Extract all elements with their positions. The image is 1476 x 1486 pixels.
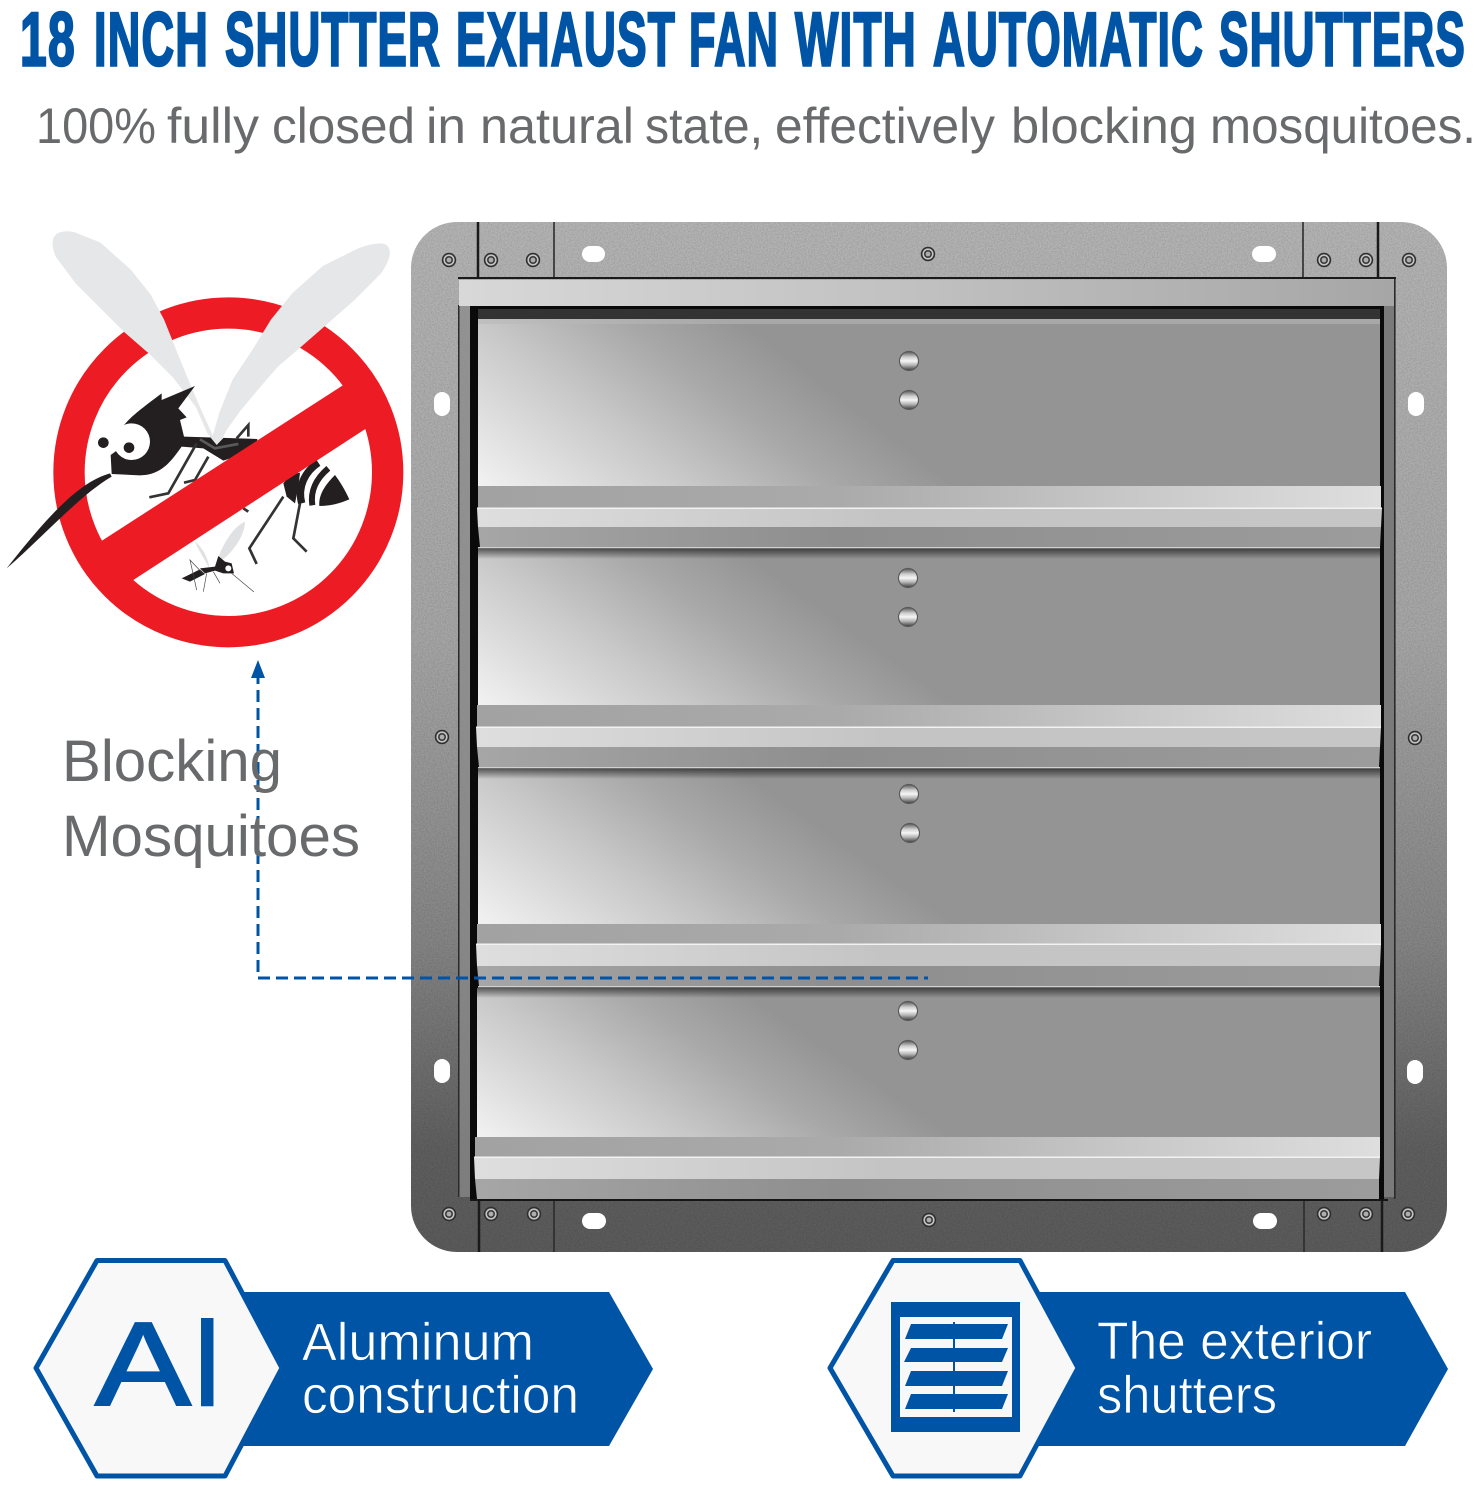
- subtitle: closed: [272, 98, 415, 154]
- hexagon: [830, 1260, 1078, 1476]
- slat rivets: [898, 352, 920, 1060]
- left wing: [53, 232, 213, 438]
- subtitle: state,: [645, 98, 763, 154]
- shutter icon: [891, 1302, 1020, 1432]
- ribbon label: Aluminum: [302, 1313, 534, 1372]
- subtitle: blocking: [1011, 98, 1197, 154]
- right wing: [213, 244, 389, 443]
- red slash: [90, 370, 377, 589]
- inner channel and opening: [458, 277, 1396, 1201]
- Al symbol: A: [95, 1298, 192, 1431]
- ribbon label: construction: [302, 1366, 579, 1425]
- slat 4: [474, 988, 1380, 1199]
- large mosquito body: [98, 386, 349, 564]
- ribbon label: The exterior: [1097, 1312, 1372, 1371]
- title: EXHAUST: [456, 0, 676, 82]
- subtitle: in: [426, 98, 466, 154]
- subtitle: mosquitoes.: [1210, 98, 1476, 154]
- small mosquito: [182, 522, 254, 592]
- Al symbol: l: [194, 1298, 220, 1431]
- proboscis: [7, 473, 112, 568]
- callout text: Blocking: [62, 729, 282, 794]
- metal frame: [411, 222, 1447, 1252]
- title: WITH: [795, 0, 917, 82]
- top bar: [459, 280, 1394, 306]
- ribbon label: shutters: [1097, 1366, 1277, 1425]
- title: AUTOMATIC: [933, 0, 1204, 82]
- frame screws: [435, 247, 1422, 1227]
- blue ribbon: [230, 1292, 653, 1446]
- badge: exterior shutters: [830, 1260, 1448, 1476]
- slat 3: [476, 769, 1381, 988]
- blue ribbon: [1025, 1292, 1448, 1446]
- no-mosquito icon: [7, 232, 389, 632]
- subtitle: effectively: [775, 98, 995, 154]
- callout text: Mosquitoes: [62, 804, 360, 869]
- shutter product photo: [411, 222, 1447, 1252]
- badge: aluminum construction: [36, 1260, 653, 1476]
- dashed callout arrow: [251, 660, 928, 978]
- red prohibition ring: [69, 313, 388, 632]
- subtitle: 100%: [36, 98, 156, 154]
- hexagon: [36, 1260, 282, 1476]
- title: INCH: [94, 0, 209, 82]
- slat 1: [477, 319, 1382, 548]
- slat 2: [476, 549, 1381, 768]
- title: 18: [20, 0, 76, 82]
- mounting holes: [434, 246, 1424, 1229]
- subtitle: natural: [480, 98, 634, 154]
- subtitle: fully: [167, 98, 259, 154]
- title: SHUTTER: [225, 0, 441, 82]
- title: FAN: [689, 0, 779, 82]
